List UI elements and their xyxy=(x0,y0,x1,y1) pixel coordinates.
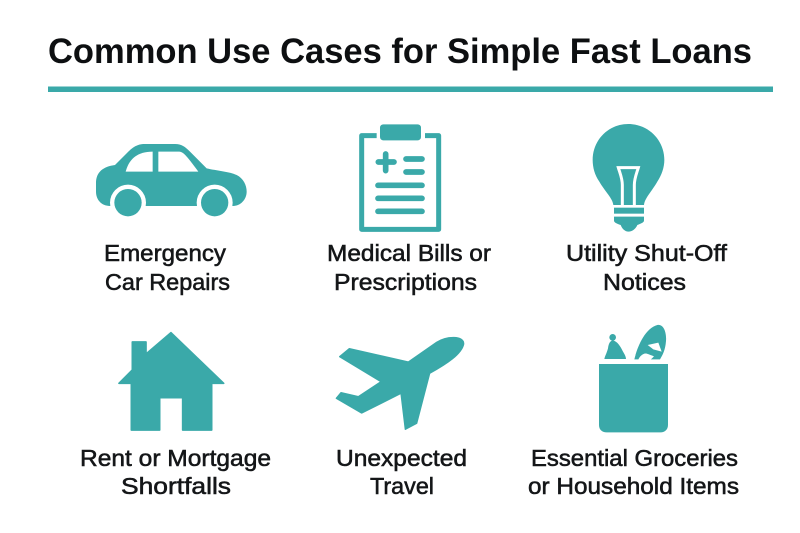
label: medical bills or prescriptions: Medical Bills or xyxy=(327,240,491,266)
icon: grocery bag xyxy=(599,325,668,432)
label: unexpected travel xyxy=(336,445,467,499)
label: utility shut-off notices: Utility Shut-Off xyxy=(566,240,728,266)
panel: unexpected travel xyxy=(336,338,467,499)
label: rent or mortgage shortfalls: Rent or Mortgage xyxy=(80,445,271,471)
label: essential groceries or household items xyxy=(528,445,739,499)
icon: house xyxy=(119,333,224,430)
label: emergency car repairs: Emergency xyxy=(104,240,227,266)
label: unexpected travel: Travel xyxy=(370,473,434,499)
panel: medical bills xyxy=(327,124,491,295)
panel: groceries xyxy=(528,325,739,499)
label: rent or mortgage shortfalls: Shortfalls xyxy=(121,473,231,499)
label: essential groceries or household items: Essential Groceries xyxy=(531,445,738,471)
panel: rent or mortgage xyxy=(80,333,271,499)
icon: clipboard xyxy=(362,124,439,229)
label: medical bills or prescriptions xyxy=(327,240,491,295)
title underline xyxy=(48,86,773,92)
panel: emergency car repairs xyxy=(96,144,247,295)
label: essential groceries or household items: or Household Items xyxy=(528,473,739,499)
label: utility shut-off notices: Notices xyxy=(603,269,686,295)
label: rent or mortgage shortfalls xyxy=(80,445,271,499)
label: unexpected travel: Unexpected xyxy=(336,445,467,471)
label: utility shut-off notices xyxy=(566,240,728,295)
icon: airplane xyxy=(336,338,464,429)
label: emergency car repairs: Car Repairs xyxy=(105,269,230,295)
title: Common Use Cases for Simple Fast Loans xyxy=(48,32,752,71)
label: medical bills or prescriptions: Prescriptions xyxy=(334,269,477,295)
icon: light bulb xyxy=(593,124,664,232)
panel: utility shut-off xyxy=(566,124,728,295)
label: emergency car repairs xyxy=(104,240,230,295)
icon: car xyxy=(96,144,247,221)
